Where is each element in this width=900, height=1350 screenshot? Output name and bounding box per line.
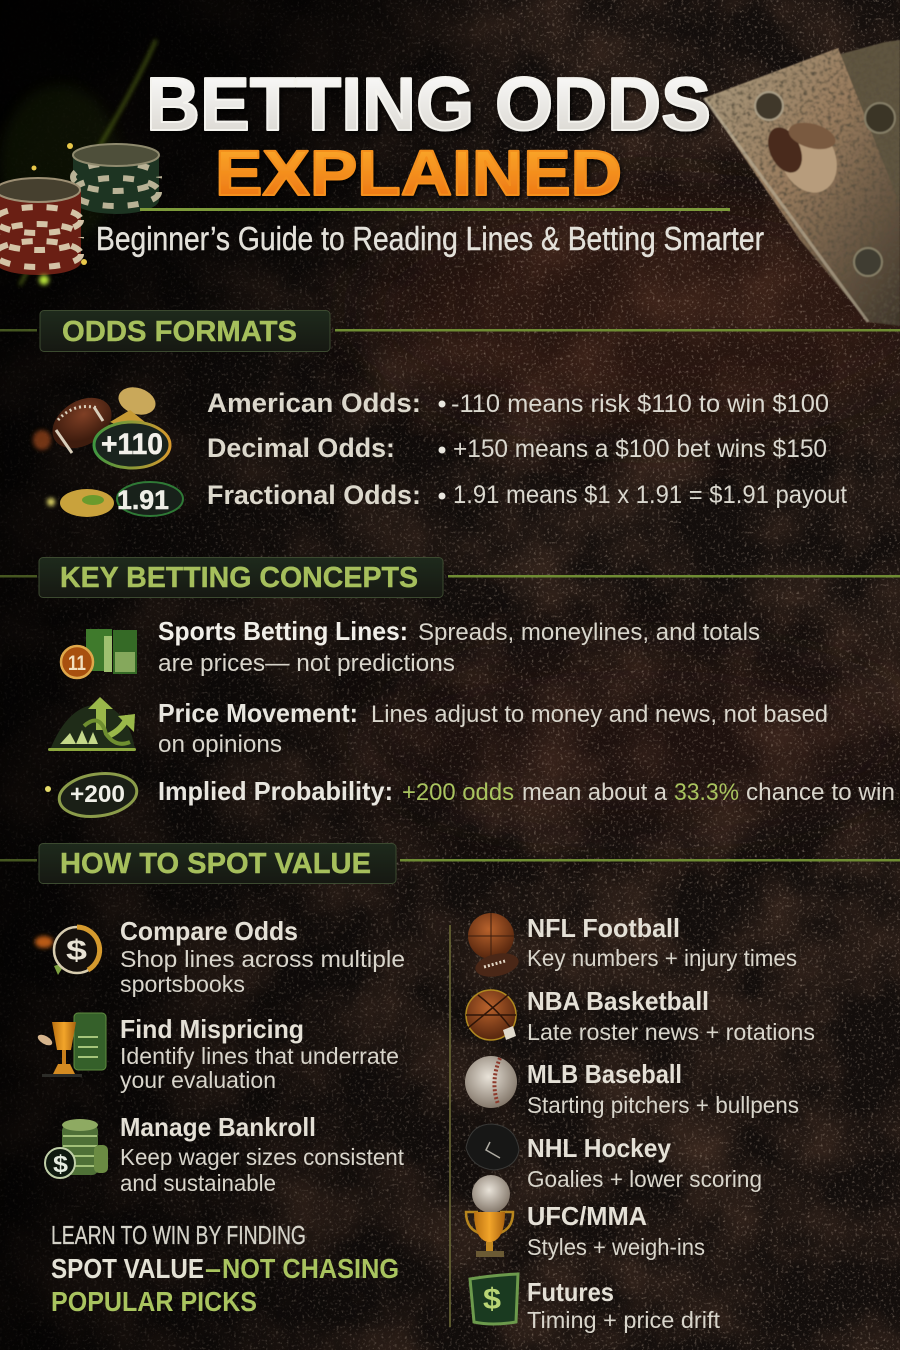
concept: implied probability: chance to win: [746, 779, 895, 806]
icon: poker chips and green streak: [0, 40, 159, 285]
icon: futures dollar note: [470, 1274, 518, 1324]
icon: gold coin and 1.91 badge: [47, 482, 183, 517]
icon: compare odds dollar ring: $: [66, 935, 87, 967]
sport: futures: [527, 1277, 721, 1333]
icon: bankroll coin stack: $: [53, 1151, 69, 1178]
sport: mlb baseball: [527, 1059, 799, 1118]
concept: sports betting lines: Spreads, moneylines, and totals: [418, 619, 760, 646]
concept: price movement: Lines adjust to money and news, not based: [371, 701, 828, 728]
tip: manage bankroll: [120, 1112, 405, 1196]
sport: mlb baseball: Starting pitchers + bullpens: [527, 1092, 799, 1118]
panel: key betting concepts: [0, 558, 900, 821]
tip: manage bankroll: Keep wager sizes consistent: [120, 1144, 405, 1170]
icon: price movement arrows: [48, 697, 136, 751]
sport: nfl football: [527, 913, 797, 971]
callout: spot value: –: [205, 1253, 221, 1284]
sport: nhl hockey: Goalies + lower scoring: [527, 1166, 762, 1192]
icon: ufc ball and trophy: [466, 1175, 513, 1257]
callout: spot value: [51, 1220, 399, 1317]
concept: sports betting lines: [158, 616, 760, 677]
sport: ufc mma: [527, 1201, 705, 1260]
concept: implied probability: +200 odds: [402, 779, 514, 806]
callout: spot value: LEARN TO WIN BY FINDING: [51, 1220, 306, 1250]
format labels: Decimal Odds:: [207, 433, 395, 463]
tip: compare odds: Shop lines across multiple: [120, 946, 405, 972]
callout: spot value: NOT CHASING: [222, 1253, 399, 1284]
concept: sports betting lines: are prices— not predictions: [158, 650, 455, 677]
sport: ufc mma: UFC/MMA: [527, 1201, 647, 1231]
icon: nhl helmet: [466, 1124, 519, 1170]
icon: nfl balls: [468, 913, 521, 980]
heading: key betting concepts: KEY BETTING CONCEPTS: [60, 562, 418, 594]
format examples: -110 means risk $110 to win $100: [451, 390, 829, 418]
sport: futures: Futures: [527, 1277, 614, 1307]
icon: cash and coin: 11: [68, 652, 86, 675]
sport: nhl hockey: [527, 1133, 762, 1192]
sport: nba basketball: NBA Basketball: [527, 986, 709, 1016]
tip: manage bankroll: and sustainable: [120, 1170, 276, 1196]
icon: find mispricing trophy and book: [36, 1013, 106, 1077]
tip: find mispricing: [120, 1014, 399, 1093]
icon: gold coin and 1.91 badge: 1.91: [117, 485, 169, 515]
icon: compare odds dollar ring: [35, 927, 100, 975]
sport: mlb baseball: MLB Baseball: [527, 1059, 682, 1089]
subtitle: Beginner’s Guide to Reading Lines & Betting Smarter: [96, 220, 764, 257]
heading: odds formats: ODDS FORMATS: [62, 316, 297, 348]
concept: implied probability: mean about a: [522, 779, 668, 806]
tip: find mispricing: Find Mispricing: [120, 1014, 304, 1044]
icon: +200 badge: [45, 769, 140, 821]
title: [146, 62, 711, 209]
icon: football and +110 badge: +110: [101, 428, 163, 461]
tip: manage bankroll: Manage Bankroll: [120, 1112, 316, 1142]
tip: find mispricing: Identify lines that underrate: [120, 1043, 399, 1069]
title line 1: BETTING ODDS: [146, 62, 711, 146]
panel: odds formats: [0, 310, 900, 517]
concept: implied probability: 33.3%: [674, 779, 739, 806]
title line 2: EXPLAINED: [215, 137, 622, 209]
concept: price movement: Price Movement:: [158, 698, 358, 728]
icon: football and +110 badge: [33, 383, 170, 468]
concept: price movement: on opinions: [158, 731, 282, 758]
sport: nhl hockey: NHL Hockey: [527, 1133, 672, 1163]
format labels: [207, 388, 421, 510]
tip: compare odds: sportsbooks: [120, 971, 245, 997]
concept: price movement: [158, 698, 828, 758]
sport: ufc mma: Styles + weigh-ins: [527, 1234, 705, 1260]
icon: dollar bills: [704, 40, 900, 326]
panel: how to spot value: [0, 844, 900, 1333]
heading: how to spot value: HOW TO SPOT VALUE: [60, 848, 371, 880]
format labels: American Odds:: [207, 388, 421, 418]
concept: implied probability: Implied Probability:: [158, 776, 393, 806]
tip: compare odds: Compare Odds: [120, 916, 298, 946]
sport: nfl football: NFL Football: [527, 913, 680, 943]
callout: spot value: POPULAR PICKS: [51, 1286, 257, 1317]
tip: find mispricing: your evaluation: [120, 1067, 276, 1093]
tip: compare odds: [120, 916, 405, 997]
heading: odds formats: [40, 310, 330, 352]
icon: mlb baseball: [465, 1056, 517, 1108]
sport: futures: Timing + price drift: [527, 1307, 721, 1333]
icon: bankroll coin stack: [45, 1119, 108, 1178]
format examples: 1.91 means $1 x 1.91 = $1.91 payout: [453, 481, 847, 509]
sport: nfl football: Key numbers + injury times: [527, 945, 797, 971]
icon: nba basketball: [466, 990, 516, 1040]
heading: how to spot value: [39, 844, 396, 884]
icon: cash and coin: [61, 629, 137, 678]
format labels: Fractional Odds:: [207, 480, 421, 510]
callout: spot value: SPOT VALUE: [51, 1253, 204, 1284]
icon: +200 badge: +200: [70, 781, 125, 808]
icon: futures dollar note: $: [483, 1283, 501, 1316]
sport: nba basketball: Late roster news + rotations: [527, 1019, 815, 1045]
format examples: +150 means a $100 bet wins $150: [453, 435, 827, 463]
concept: sports betting lines: Sports Betting Lines:: [158, 616, 408, 646]
format examples: [438, 390, 847, 509]
sport: nba basketball: [527, 986, 815, 1045]
concept: implied probability: [158, 776, 895, 806]
